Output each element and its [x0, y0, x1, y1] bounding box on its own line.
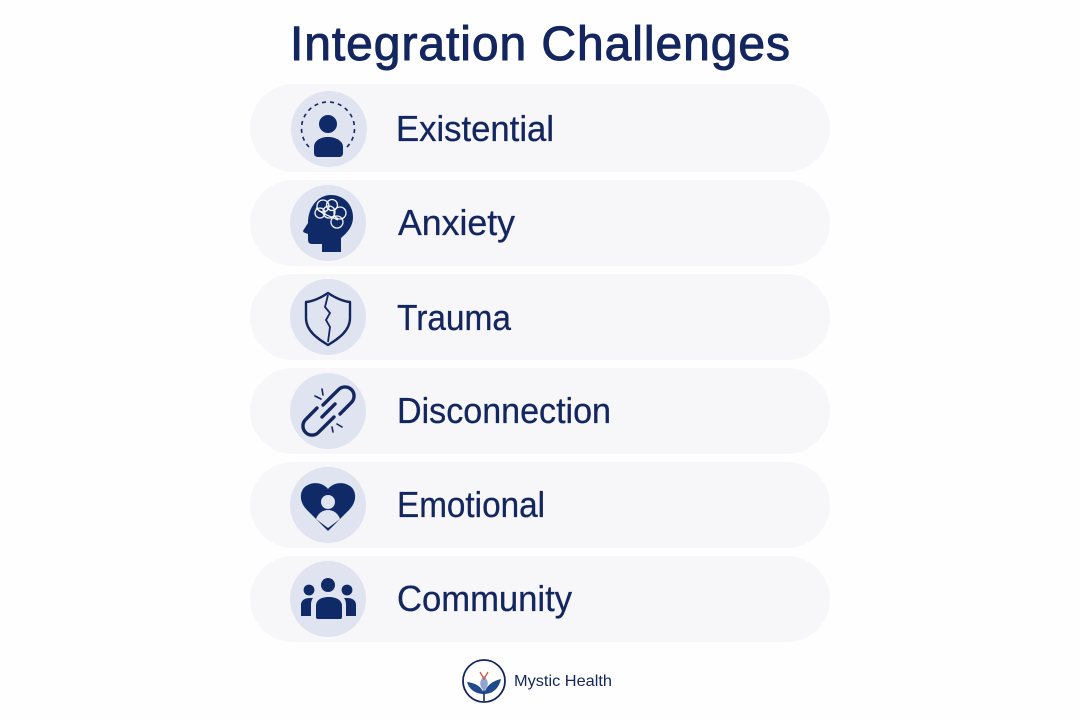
icon: heart with person	[290, 467, 366, 543]
panel: emotional	[250, 462, 830, 548]
icon: head with tangled brain	[290, 185, 366, 261]
title: Integration Challenges	[290, 18, 790, 71]
label: disconnection: Disconnection	[397, 390, 611, 431]
wordmark: Mystic Health	[514, 673, 612, 690]
icon: person in dashed circle	[291, 91, 367, 167]
label: existential: Existential	[396, 108, 554, 149]
icon: broken chain link	[290, 373, 366, 449]
label: anxiety: Anxiety	[398, 202, 515, 243]
label: trauma: Trauma	[397, 297, 512, 338]
panel: disconnection	[250, 368, 830, 454]
logo: mystic health	[463, 660, 612, 702]
label: community: Community	[397, 578, 572, 619]
icon: three people	[290, 561, 366, 637]
panel: existential	[250, 84, 830, 172]
label: emotional: Emotional	[397, 484, 545, 525]
panel: community	[250, 556, 830, 642]
panel: trauma	[250, 274, 830, 360]
panel: anxiety	[250, 180, 830, 266]
icon: lotus in circle	[463, 660, 505, 702]
icon: cracked shield	[290, 279, 366, 355]
